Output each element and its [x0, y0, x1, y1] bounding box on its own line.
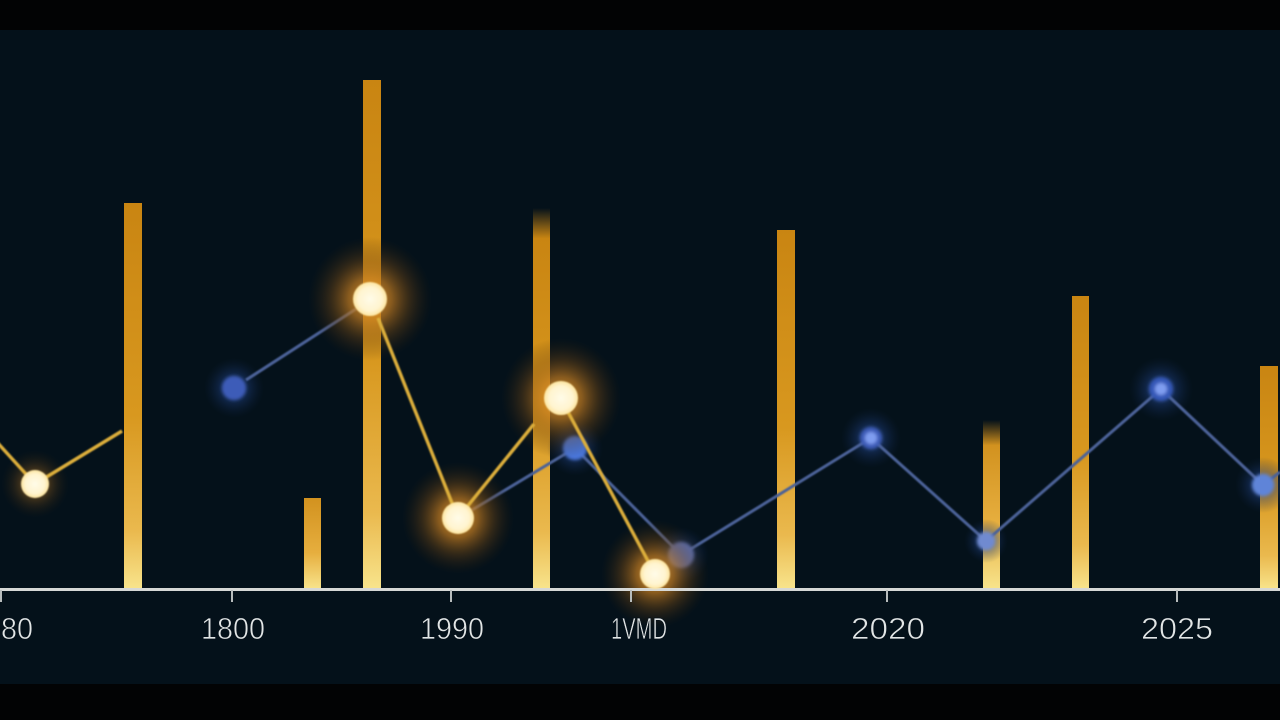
axis labels: 1990 — [420, 611, 484, 646]
blue glows — [204, 357, 1280, 583]
x axis — [0, 588, 1280, 602]
bar series — [124, 80, 1278, 589]
axis labels: 2025 — [1141, 611, 1213, 646]
blue data points — [222, 376, 1274, 568]
blue line series — [246, 309, 1280, 555]
gold line series — [0, 318, 655, 574]
axis labels: 1800 — [201, 611, 265, 646]
axis labels — [0, 611, 1213, 646]
axis labels: 2020 — [851, 611, 925, 646]
gold glows — [1, 237, 709, 628]
axis labels: 1VMD — [611, 611, 667, 646]
gold data points — [21, 282, 670, 589]
